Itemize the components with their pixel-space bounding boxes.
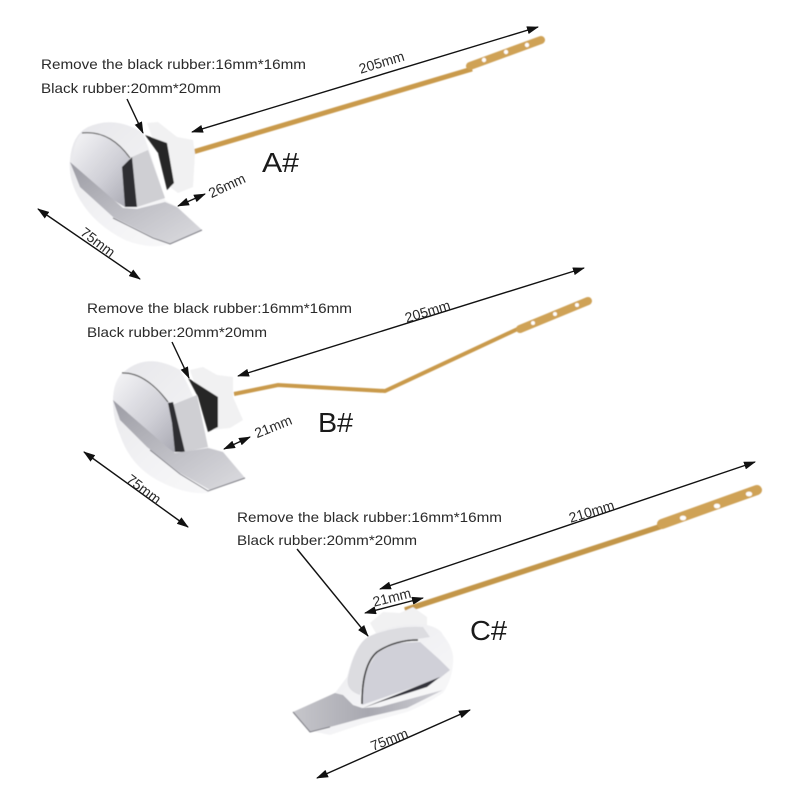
brass rod C <box>405 526 662 610</box>
label B dimensions: 21mm <box>252 412 294 441</box>
chrome body C <box>293 624 453 735</box>
white knob C <box>370 607 427 640</box>
chrome top cap C <box>348 627 430 695</box>
product A: trip lever with straight rod <box>70 40 541 246</box>
label B dimensions <box>84 268 584 527</box>
brass rod A <box>193 69 472 152</box>
label B dimensions: Black rubber:20mm*20mm <box>87 324 267 340</box>
brass rod B <box>234 326 524 394</box>
chrome face B <box>113 373 185 452</box>
label C dimensions <box>237 462 755 778</box>
label A dimensions: Black rubber:20mm*20mm <box>41 80 221 96</box>
label B dimensions: 75mm <box>124 471 164 507</box>
label C dimensions: Black rubber:20mm*20mm <box>237 532 417 548</box>
label C dimensions: C# <box>470 615 507 646</box>
black rubber A <box>145 135 174 190</box>
chrome handle C <box>293 690 443 732</box>
label A dimensions: Remove the black rubber:16mm*16mm <box>41 56 306 72</box>
product C: trip lever facing left <box>293 490 757 735</box>
white knob A <box>147 122 195 193</box>
chrome cap B <box>172 395 208 452</box>
label A dimensions: 26mm <box>206 170 248 201</box>
label C dimensions: 75mm <box>368 725 410 754</box>
chrome body A <box>70 122 202 246</box>
label B dimensions: 205mm <box>403 297 452 326</box>
product B: trip lever with bent rod <box>113 301 588 493</box>
white knob B <box>190 367 243 430</box>
label B dimensions: B# <box>318 407 353 438</box>
chrome handle A <box>70 162 202 244</box>
chrome face C <box>362 642 450 705</box>
label C dimensions: 210mm <box>567 497 616 526</box>
label C dimensions: Remove the black rubber:16mm*16mm <box>237 509 502 525</box>
label C dimensions: 21mm <box>371 585 413 610</box>
label A dimensions <box>38 27 538 279</box>
label A dimensions: 75mm <box>78 224 118 260</box>
black rubber B <box>188 378 218 432</box>
label B dimensions: Remove the black rubber:16mm*16mm <box>87 300 352 316</box>
label A dimensions: 205mm <box>357 48 406 77</box>
chrome handle B <box>113 400 245 490</box>
label A dimensions: A# <box>262 147 299 178</box>
chrome body B <box>113 361 245 493</box>
chrome cap A <box>132 150 165 207</box>
chrome face A <box>73 131 137 207</box>
